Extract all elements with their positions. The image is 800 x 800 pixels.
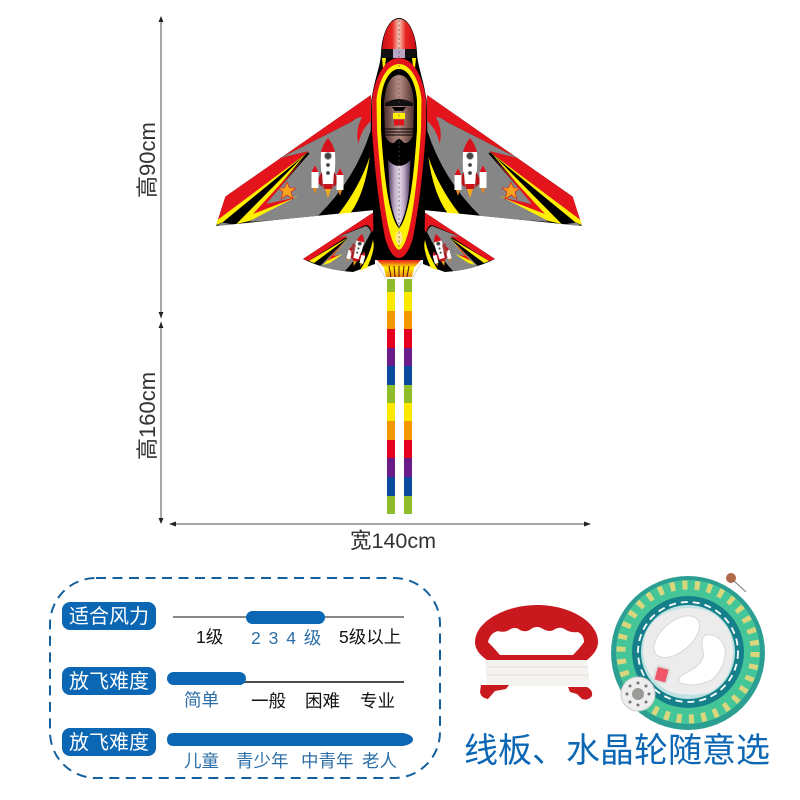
row: wind level: 2 3 4 级 (251, 628, 321, 648)
label: height 90cm: 高90cm (135, 122, 160, 198)
yellow rim (376, 64, 422, 250)
row: suitable ages: 放飞难度 (69, 731, 149, 754)
yellow glow at stripe tip (396, 231, 402, 245)
label: height 160cm: 高160cm (135, 372, 160, 460)
row: flying difficulty: 简单 (184, 690, 219, 710)
row: wind level: 适合风力 (69, 605, 149, 628)
cockpit canopy (384, 75, 414, 143)
row: suitable ages: 青少年 (236, 751, 288, 771)
row: flying difficulty: 放飞难度 (69, 670, 149, 693)
tail flame (377, 260, 421, 279)
row: wind level: 1级 (196, 627, 223, 647)
right wing (423, 95, 582, 226)
centre dotted seam (398, 20, 400, 255)
row: suitable ages: 儿童 (184, 751, 219, 771)
row: suitable ages (62, 728, 413, 771)
fuselage (372, 18, 426, 260)
reel red lock (653, 666, 670, 684)
reel clip (726, 573, 736, 583)
row: suitable ages: 中青年 (301, 751, 354, 771)
caption: line board and crystal reel: 线板、水晶轮随意选 (464, 732, 770, 770)
black inner (381, 69, 417, 228)
kite tail ribbons (387, 279, 412, 514)
reel white handle (643, 608, 733, 695)
row: suitable ages: 老人 (362, 751, 397, 771)
kite: jet plane (216, 18, 582, 279)
red rim (372, 58, 426, 258)
dimension: height 90cm arrow (158, 16, 164, 318)
row: flying difficulty: 专业 (360, 691, 395, 711)
row: wind level (62, 602, 404, 648)
left wing (216, 95, 375, 226)
small white spool (621, 677, 655, 711)
dimension: width 140cm arrow (169, 522, 591, 526)
icon: crystal kite reel (611, 573, 765, 730)
right tail fin (423, 212, 495, 272)
row: flying difficulty (62, 667, 404, 711)
label: width 140cm: 宽140cm (350, 529, 436, 553)
reel grip holes (646, 608, 725, 685)
row: wind level: 5级以上 (339, 627, 401, 647)
panel: flying specs (50, 578, 440, 778)
fuselage lilac stripe (388, 160, 410, 227)
left tail fin (303, 212, 375, 272)
row: flying difficulty: 困难 (305, 691, 340, 711)
dimension: height 160cm arrow (158, 322, 164, 524)
icon: red line board with white string (475, 605, 598, 700)
row: flying difficulty: 一般 (251, 691, 286, 711)
